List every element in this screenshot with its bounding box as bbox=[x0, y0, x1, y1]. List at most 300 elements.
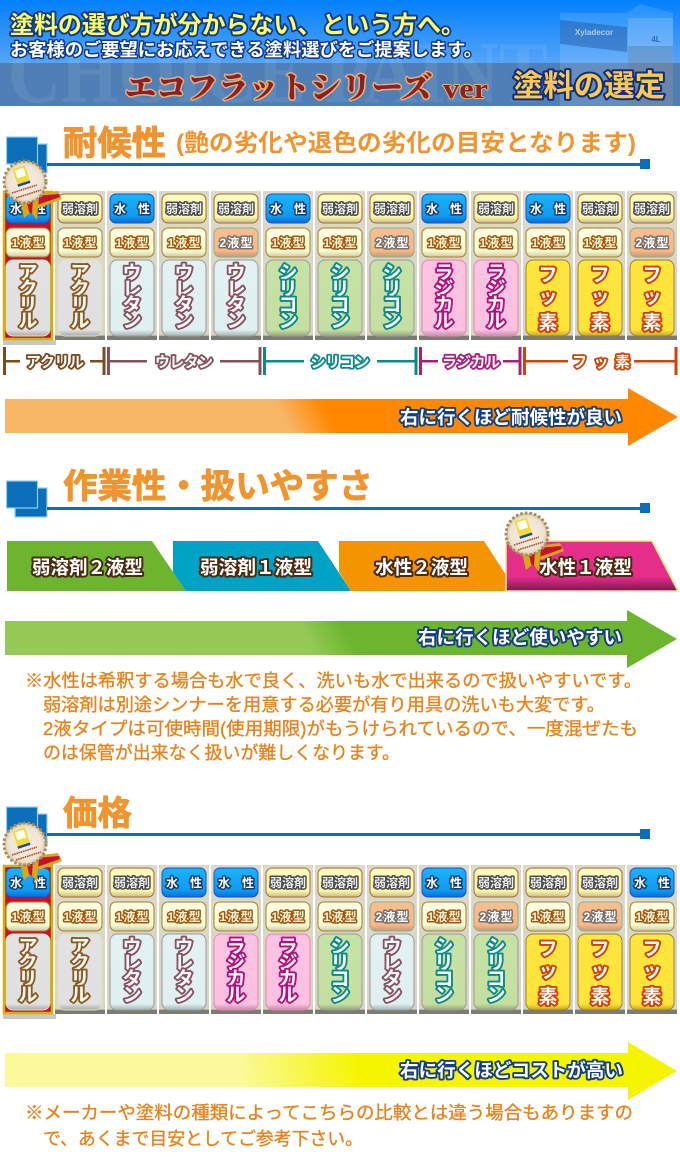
tab: 弱溶剤2液型: 弱溶剤２液型 bbox=[32, 557, 143, 578]
badge: 1液型: 1液型 bbox=[116, 235, 148, 250]
chart: price ranking bbox=[3, 865, 677, 1019]
column 6: 水性 1液型 シリコン bbox=[263, 191, 313, 340]
resin: ラジカル: ル bbox=[434, 311, 454, 332]
resin: アクリル: リ bbox=[18, 295, 38, 316]
arrow: workability: 右に行くほど使いやすい bbox=[418, 627, 622, 648]
resin: ラジカル bbox=[266, 934, 310, 1010]
badge: 弱溶剤: 弱溶剤 bbox=[374, 201, 410, 216]
resin: ウレタン: タ bbox=[174, 968, 194, 990]
resin: アクリル: ル bbox=[18, 311, 38, 332]
resin: アクリル bbox=[6, 934, 50, 1010]
tab: 弱溶剤2液型 bbox=[7, 541, 186, 591]
resin: フッ素: フ bbox=[642, 939, 662, 960]
resin: アクリル: リ bbox=[70, 969, 90, 990]
badge: 弱溶剤: 弱溶剤 bbox=[634, 201, 670, 216]
badge: 弱溶剤: 弱溶剤 bbox=[270, 875, 306, 890]
badge: 1液型: 1液型 bbox=[64, 235, 96, 250]
resin: フッ素: フ bbox=[642, 265, 662, 286]
badge: 2液型 bbox=[214, 228, 258, 257]
column 8: 弱溶剤 2液型 ウレタン bbox=[367, 865, 417, 1014]
resin: ラジカル: ル bbox=[486, 311, 506, 332]
resin: フッ素 bbox=[578, 260, 622, 336]
badge: 水性 bbox=[6, 868, 50, 897]
resin: ウレタン: ウ bbox=[174, 262, 194, 284]
resin: ウレタン bbox=[110, 260, 154, 336]
resin: アクリル: ク bbox=[70, 278, 90, 300]
range: ウレタン bbox=[107, 347, 262, 375]
resin: フッ素: フ bbox=[538, 265, 558, 286]
badge: 弱溶剤 bbox=[578, 868, 622, 897]
tab: 水性1液型 highlighted bbox=[506, 541, 678, 591]
range: フッ素: フッ素 bbox=[572, 354, 630, 371]
badge: 1液型 bbox=[58, 228, 102, 257]
resin: ウレタン: ン bbox=[122, 311, 142, 332]
range: アクリル bbox=[3, 347, 106, 375]
resin: ラジカル: ラ bbox=[486, 263, 506, 284]
resin: フッ素: フ bbox=[538, 939, 558, 960]
resin: ラジカル: ル bbox=[226, 985, 246, 1006]
resin: シリコン: ン bbox=[330, 985, 350, 1006]
resin: フッ素 bbox=[526, 934, 570, 1010]
badge: 2液型 bbox=[370, 228, 414, 257]
resin: シリコン: リ bbox=[434, 953, 454, 974]
badge: 水性: 水 性 bbox=[166, 875, 202, 890]
resin: ウレタン bbox=[214, 260, 258, 336]
badge: 水性: 水 性 bbox=[530, 201, 566, 216]
ghost background text: CHOICE PAINT bbox=[8, 25, 548, 122]
resin: フッ素: 素 bbox=[590, 986, 610, 1008]
badge: 弱溶剤: 弱溶剤 bbox=[530, 875, 566, 890]
resin: フッ素: 素 bbox=[538, 986, 558, 1008]
range: ラジカル: ラジカル bbox=[442, 354, 500, 371]
resin: シリコン: コ bbox=[434, 969, 454, 990]
badge: 1液型 bbox=[214, 902, 258, 931]
badge: 1液型: 1液型 bbox=[64, 909, 96, 924]
badge: 水性 bbox=[110, 194, 154, 223]
resin: アクリル: ク bbox=[70, 952, 90, 974]
badge: 水性: 水 性 bbox=[218, 875, 254, 890]
badge: 2液型 bbox=[474, 902, 518, 931]
range: フッ素 bbox=[523, 347, 678, 375]
resin: シリコン: ン bbox=[486, 985, 506, 1006]
section heading: workability: 作業性・扱いやすさ bbox=[63, 468, 373, 506]
resin: シリコン: リ bbox=[486, 953, 506, 974]
resin: フッ素: ッ bbox=[642, 287, 662, 308]
resin: シリコン bbox=[318, 260, 362, 336]
column 11: 弱溶剤 1液型 フッ素 bbox=[523, 865, 573, 1014]
resin: ウレタン: レ bbox=[226, 279, 246, 300]
resin: フッ素 bbox=[630, 934, 674, 1010]
badge: 1液型 bbox=[58, 902, 102, 931]
resin: ウレタン: ウ bbox=[122, 262, 142, 284]
resin: シリコン: リ bbox=[382, 279, 402, 300]
badge: 弱溶剤: 弱溶剤 bbox=[218, 201, 254, 216]
resin: シリコン: シ bbox=[486, 937, 506, 958]
badge: 1液型: 1液型 bbox=[428, 909, 460, 924]
range: シリコン: シリコン bbox=[310, 354, 370, 371]
badge: 弱溶剤: 弱溶剤 bbox=[582, 201, 618, 216]
resin: ウレタン: タ bbox=[382, 968, 402, 990]
badge: 水性 bbox=[214, 868, 258, 897]
resin: アクリル: ア bbox=[70, 937, 90, 958]
resin: ウレタン bbox=[162, 260, 206, 336]
column 12: 弱溶剤 2液型 フッ素 bbox=[575, 865, 625, 1014]
resin: ラジカル: ル bbox=[278, 985, 298, 1006]
badge: 1液型: 1液型 bbox=[428, 235, 460, 250]
tab: 水性1液型 highlighted: 水性１液型 bbox=[539, 557, 632, 578]
resin: アクリル: ク bbox=[18, 952, 38, 974]
badge: 1液型 bbox=[6, 228, 50, 257]
tabs: workability ranking bbox=[7, 541, 678, 591]
column 4: 弱溶剤 1液型 ウレタン bbox=[159, 191, 209, 340]
section heading: weather resistance bbox=[6, 125, 650, 173]
resin: ラジカル: カ bbox=[278, 969, 298, 990]
badge: 弱溶剤 bbox=[526, 868, 570, 897]
badge: 弱溶剤 bbox=[58, 868, 102, 897]
arrow: weather resistance bbox=[5, 388, 678, 446]
badge: 1液型: 1液型 bbox=[12, 235, 44, 250]
resin: フッ素: 素 bbox=[642, 986, 662, 1008]
badge: 1液型 bbox=[318, 228, 362, 257]
resin: シリコン: シ bbox=[330, 937, 350, 958]
badge: 水性: 水 性 bbox=[270, 201, 306, 216]
section heading: weather resistance: 耐候性 bbox=[63, 125, 166, 163]
resin: フッ素: ッ bbox=[642, 961, 662, 982]
badge: 1液型: 1液型 bbox=[116, 909, 148, 924]
column 7: 弱溶剤 1液型 シリコン bbox=[315, 191, 365, 340]
resin: ラジカル: ラ bbox=[278, 937, 298, 958]
resin: アクリル: ア bbox=[18, 937, 38, 958]
resin: アクリル: ル bbox=[70, 985, 90, 1006]
badge: 弱溶剤 bbox=[266, 868, 310, 897]
section heading: price: 価格 bbox=[63, 795, 132, 833]
resin: ウレタン bbox=[110, 934, 154, 1010]
badge: 弱溶剤: 弱溶剤 bbox=[322, 875, 358, 890]
badge: 弱溶剤 bbox=[578, 194, 622, 223]
sub headline: お客様のご要望にお応えできる塗料選びをご提案します。 bbox=[10, 39, 482, 60]
badge: 水性: 水 性 bbox=[114, 201, 150, 216]
resin: アクリル: ア bbox=[18, 263, 38, 284]
badge: 弱溶剤 bbox=[474, 868, 518, 897]
resin: シリコン: シ bbox=[382, 263, 402, 284]
resin: シリコン: ン bbox=[434, 985, 454, 1006]
badge: 2液型: 2液型 bbox=[636, 235, 668, 250]
badge: 水性 bbox=[630, 868, 674, 897]
resin: シリコン: ン bbox=[278, 311, 298, 332]
column 5: 水性 1液型 ラジカル bbox=[211, 865, 261, 1014]
resin: ウレタン: ウ bbox=[122, 936, 142, 958]
resin: フッ素: フ bbox=[590, 939, 610, 960]
badge: 弱溶剤: 弱溶剤 bbox=[478, 875, 514, 890]
note: workability: 弱溶剤は別途シンナーを用意する必要が有り用具の洗いも大変です。 bbox=[43, 695, 605, 715]
resin: ウレタン: ウ bbox=[382, 936, 402, 958]
resin: ウレタン: ン bbox=[382, 985, 402, 1006]
badge: 1液型: 1液型 bbox=[324, 909, 356, 924]
arrow: weather resistance: 右に行くほど耐候性が良い bbox=[400, 407, 622, 428]
resin: シリコン: シ bbox=[330, 263, 350, 284]
badge: 1液型 bbox=[526, 228, 570, 257]
resin: ウレタン: レ bbox=[382, 953, 402, 974]
resin: シリコン: ン bbox=[330, 311, 350, 332]
badge: 1液型 bbox=[318, 902, 362, 931]
resin: シリコン bbox=[474, 934, 518, 1010]
resin: ウレタン: タ bbox=[174, 294, 194, 316]
note: price bbox=[25, 1103, 633, 1149]
resin: シリコン: リ bbox=[278, 279, 298, 300]
badge: 2液型: 2液型 bbox=[220, 235, 252, 250]
resin: フッ素: ッ bbox=[538, 287, 558, 308]
column 8: 弱溶剤 2液型 シリコン bbox=[367, 191, 417, 340]
section heading: weather resistance: (艶の劣化や退色の劣化の目安となります) bbox=[176, 130, 636, 157]
badge: 1液型: 1液型 bbox=[532, 909, 564, 924]
badge: 1液型: 1液型 bbox=[480, 235, 512, 250]
section heading: workability bbox=[6, 468, 650, 517]
badge: 水性 bbox=[266, 194, 310, 223]
resin: アクリル: リ bbox=[18, 969, 38, 990]
badge: 1液型 bbox=[474, 228, 518, 257]
badge: 1液型 bbox=[6, 902, 50, 931]
note: workability: 2液タイプは可使時間(使用期限)がもうけられているので、一度混ぜたも bbox=[43, 719, 638, 739]
badge: 1液型: 1液型 bbox=[168, 235, 200, 250]
badge: 1液型 bbox=[526, 902, 570, 931]
headline: 塗料の選び方が分からない、という方へ。 bbox=[10, 11, 465, 39]
resin: ラジカル: カ bbox=[226, 969, 246, 990]
badge: 水性 bbox=[422, 868, 466, 897]
resin: ラジカル bbox=[422, 260, 466, 336]
badge: 弱溶剤 bbox=[630, 194, 674, 223]
badge: 弱溶剤 bbox=[318, 194, 362, 223]
resin: ウレタン: タ bbox=[226, 294, 246, 316]
icon: medal on price column bbox=[4, 823, 62, 882]
selection title: 塗料の選定 bbox=[513, 70, 665, 103]
badge: 1液型 bbox=[630, 902, 674, 931]
resin: ラジカル: ラ bbox=[226, 937, 246, 958]
note: price: で、あくまで目安としてご参考下さい。 bbox=[43, 1129, 363, 1149]
resin: アクリル: ル bbox=[18, 985, 38, 1006]
badge: 1液型 bbox=[422, 902, 466, 931]
resin: ラジカル: カ bbox=[434, 295, 454, 316]
badge: 2液型: 2液型 bbox=[376, 909, 408, 924]
arrow: price bbox=[5, 1042, 677, 1100]
resin: アクリル bbox=[58, 934, 102, 1010]
resin: ウレタン: レ bbox=[174, 279, 194, 300]
badge: 1液型 bbox=[266, 228, 310, 257]
badge: 1液型: 1液型 bbox=[584, 235, 616, 250]
badge: 水性 bbox=[6, 194, 50, 223]
column 7: 弱溶剤 1液型 シリコン bbox=[315, 865, 365, 1014]
resin: シリコン: ン bbox=[382, 311, 402, 332]
resin: ウレタン: タ bbox=[122, 294, 142, 316]
badge: 2液型: 2液型 bbox=[480, 909, 512, 924]
resin: フッ素 bbox=[630, 260, 674, 336]
chart: weather resistance ranking bbox=[3, 191, 677, 345]
column 3: 弱溶剤 1液型 ウレタン bbox=[107, 865, 157, 1014]
resin: フッ素: ッ bbox=[590, 961, 610, 982]
paint can watermark: Xyladecor bbox=[575, 28, 613, 37]
resin: アクリル: ク bbox=[18, 278, 38, 300]
resin: シリコン: シ bbox=[434, 937, 454, 958]
resin: シリコン: リ bbox=[330, 279, 350, 300]
resin: アクリル bbox=[58, 260, 102, 336]
tab: 弱溶剤1液型: 弱溶剤１液型 bbox=[200, 557, 312, 578]
badge: 1液型: 1液型 bbox=[12, 909, 44, 924]
badge: 水性: 水 性 bbox=[10, 201, 46, 216]
resin: シリコン: コ bbox=[486, 969, 506, 990]
badge: 1液型 bbox=[422, 228, 466, 257]
icon: medal on first column bbox=[4, 161, 62, 220]
badge: 1液型: 1液型 bbox=[324, 235, 356, 250]
resin: シリコン: コ bbox=[278, 295, 298, 316]
badge: 1液型 bbox=[266, 902, 310, 931]
range: シリコン bbox=[263, 347, 418, 375]
resin: シリコン: コ bbox=[330, 969, 350, 990]
series title: エコフラットシリーズ bbox=[125, 72, 432, 105]
badge: 弱溶剤: 弱溶剤 bbox=[582, 875, 618, 890]
badge: 1液型: 1液型 bbox=[532, 235, 564, 250]
column 5: 弱溶剤 2液型 ウレタン bbox=[211, 191, 261, 340]
badge: 水性: 水 性 bbox=[426, 875, 462, 890]
badge: 弱溶剤: 弱溶剤 bbox=[62, 875, 98, 890]
resin: シリコン bbox=[422, 934, 466, 1010]
resin: フッ素: 素 bbox=[590, 312, 610, 334]
paint can watermark: 4L bbox=[651, 35, 661, 44]
resin: ウレタン bbox=[370, 934, 414, 1010]
note: workability: のは保管が出来なく扱いが難しくなります。 bbox=[43, 743, 400, 763]
column 2: 弱溶剤 1液型 アクリル bbox=[55, 191, 105, 340]
series title: ver bbox=[443, 73, 488, 105]
badge: 2液型 bbox=[578, 902, 622, 931]
badge: 1液型: 1液型 bbox=[272, 909, 304, 924]
column 10: 弱溶剤 1液型 ラジカル bbox=[471, 191, 521, 340]
resin: ラジカル bbox=[214, 934, 258, 1010]
resin: シリコン bbox=[318, 934, 362, 1010]
badge: 1液型 bbox=[110, 228, 154, 257]
badge: 弱溶剤 bbox=[110, 868, 154, 897]
badge: 2液型 bbox=[370, 902, 414, 931]
resin: ウレタン: ウ bbox=[174, 936, 194, 958]
resin: ウレタン: レ bbox=[174, 953, 194, 974]
badge: 水性: 水 性 bbox=[10, 875, 46, 890]
column 11: 水性 1液型 フッ素 bbox=[523, 191, 573, 340]
badge: 弱溶剤 bbox=[370, 868, 414, 897]
range labels by resin type bbox=[3, 347, 678, 375]
resin: ラジカル: ラ bbox=[434, 263, 454, 284]
column 4: 水性 1液型 ウレタン bbox=[159, 865, 209, 1014]
badge: 弱溶剤: 弱溶剤 bbox=[62, 201, 98, 216]
range: ウレタン: ウレタン bbox=[155, 354, 213, 371]
resin: ウレタン: タ bbox=[122, 968, 142, 990]
badge: 1液型: 1液型 bbox=[272, 235, 304, 250]
resin: シリコン bbox=[266, 260, 310, 336]
note: workability: ※水性は希釈する場合も水で良く、洗いも水で出来るので扱いやすいです。 bbox=[25, 671, 642, 691]
column 12: 弱溶剤 1液型 フッ素 bbox=[575, 191, 625, 340]
column 1 highlighted: 水性 1液型 アクリル bbox=[3, 192, 56, 345]
badge: 水性 bbox=[526, 194, 570, 223]
resin: ウレタン bbox=[162, 934, 206, 1010]
resin: ウレタン: ン bbox=[226, 311, 246, 332]
resin: フッ素: ッ bbox=[590, 287, 610, 308]
badge: 弱溶剤 bbox=[58, 194, 102, 223]
badge: 弱溶剤: 弱溶剤 bbox=[322, 201, 358, 216]
badge: 水性: 水 性 bbox=[634, 875, 670, 890]
resin: シリコン: コ bbox=[382, 295, 402, 316]
note: price: ※メーカーや塗料の種類によってこちらの比較とは違う場合もありますの bbox=[25, 1103, 633, 1123]
resin: フッ素 bbox=[526, 260, 570, 336]
resin: アクリル: ル bbox=[70, 311, 90, 332]
badge: 弱溶剤: 弱溶剤 bbox=[478, 201, 514, 216]
column 9: 水性 1液型 ラジカル bbox=[419, 191, 469, 340]
resin: ウレタン: ン bbox=[174, 985, 194, 1006]
resin: フッ素: フ bbox=[590, 265, 610, 286]
resin: シリコン: リ bbox=[330, 953, 350, 974]
column 13: 弱溶剤 2液型 フッ素 bbox=[627, 191, 677, 340]
badge: 水性 bbox=[422, 194, 466, 223]
badge: 1液型: 1液型 bbox=[636, 909, 668, 924]
tab: 水性2液型 bbox=[339, 541, 506, 591]
section heading: price bbox=[6, 795, 650, 843]
badge: 弱溶剤 bbox=[214, 194, 258, 223]
badge: 2液型: 2液型 bbox=[376, 235, 408, 250]
note: workability bbox=[25, 671, 642, 763]
badge: 弱溶剤 bbox=[162, 194, 206, 223]
arrow: price: 右に行くほどコストが高い bbox=[400, 1060, 623, 1081]
column 6: 弱溶剤 1液型 ラジカル bbox=[263, 865, 313, 1014]
resin: ラジカル: ジ bbox=[226, 953, 246, 974]
resin: フッ素 bbox=[578, 934, 622, 1010]
resin: シリコン: コ bbox=[330, 295, 350, 316]
resin: ウレタン: ウ bbox=[226, 262, 246, 284]
icon: medal on 水性1液型 tab bbox=[506, 513, 564, 572]
range: ラジカル bbox=[419, 347, 522, 375]
resin: フッ素: 素 bbox=[642, 312, 662, 334]
badge: 弱溶剤 bbox=[474, 194, 518, 223]
badge: 弱溶剤 bbox=[318, 868, 362, 897]
resin: ウレタン: ン bbox=[174, 311, 194, 332]
resin: フッ素: ッ bbox=[538, 961, 558, 982]
badge: 1液型: 1液型 bbox=[168, 909, 200, 924]
badge: 弱溶剤: 弱溶剤 bbox=[114, 875, 150, 890]
resin: シリコン: シ bbox=[278, 263, 298, 284]
column 3: 水性 1液型 ウレタン bbox=[107, 191, 157, 340]
resin: ラジカル: ジ bbox=[434, 279, 454, 300]
range: アクリル: アクリル bbox=[26, 354, 84, 371]
resin: ラジカル: ジ bbox=[486, 279, 506, 300]
column 2: 弱溶剤 1液型 アクリル bbox=[55, 865, 105, 1014]
resin: シリコン bbox=[370, 260, 414, 336]
badge: 1液型: 1液型 bbox=[220, 909, 252, 924]
badge: 弱溶剤: 弱溶剤 bbox=[166, 201, 202, 216]
column 10: 弱溶剤 2液型 シリコン bbox=[471, 865, 521, 1014]
resin: ウレタン: レ bbox=[122, 279, 142, 300]
badge: 1液型 bbox=[110, 902, 154, 931]
arrow: workability bbox=[5, 610, 677, 668]
badge: 水性: 水 性 bbox=[426, 201, 462, 216]
paint can watermark bbox=[560, 4, 673, 106]
resin: フッ素: 素 bbox=[538, 312, 558, 334]
resin: ラジカル bbox=[474, 260, 518, 336]
badge: 1液型 bbox=[162, 902, 206, 931]
badge: 1液型 bbox=[578, 228, 622, 257]
resin: ウレタン: ン bbox=[122, 985, 142, 1006]
badge: 2液型: 2液型 bbox=[584, 909, 616, 924]
resin: アクリル bbox=[6, 260, 50, 336]
tab: 弱溶剤1液型 bbox=[173, 541, 351, 591]
badge: 弱溶剤: 弱溶剤 bbox=[374, 875, 410, 890]
resin: ラジカル: カ bbox=[486, 295, 506, 316]
tab: 水性2液型: 水性２液型 bbox=[375, 557, 468, 578]
column 1 highlighted: 水性 1液型 アクリル bbox=[3, 866, 56, 1019]
resin: アクリル: ア bbox=[70, 263, 90, 284]
